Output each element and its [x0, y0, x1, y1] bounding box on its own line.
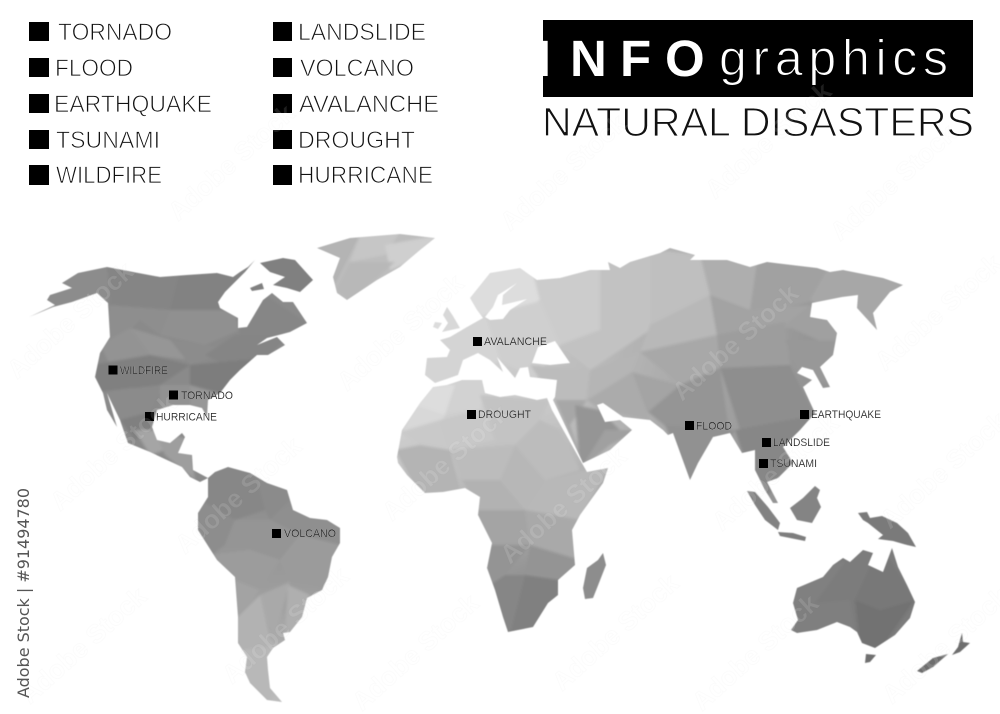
watermark pattern: Adobe Stock — [162, 97, 301, 226]
legend item: flood: FLOOD — [55, 55, 133, 82]
watermark pattern: Adobe Stock — [331, 267, 470, 396]
arctic islands — [250, 257, 314, 292]
title banner: INFOgraphics: F — [620, 30, 651, 87]
legend item: tornado: TORNADO — [58, 19, 172, 46]
watermark pattern: Adobe Stock — [706, 407, 845, 536]
island: Madagascar — [583, 553, 606, 599]
watermark pattern: Adobe Stock — [1, 255, 140, 384]
island: New Guinea — [858, 512, 916, 547]
legend item: tsunami: TSUNAMI — [56, 127, 160, 154]
legend: disaster types — [29, 19, 439, 189]
watermark pattern: Adobe Stock — [14, 580, 153, 709]
continent: North America — [32, 261, 308, 482]
watermark pattern: Adobe Stock — [216, 560, 355, 689]
legend item: hurricane: HURRICANE — [298, 162, 433, 189]
island: Sumatra — [747, 491, 780, 530]
watermark pattern: Adobe Stock — [376, 397, 515, 526]
title banner: INFOgraphics: I — [537, 30, 551, 87]
title banner: INFOgraphics: O — [665, 30, 705, 87]
marker: tornado: TORNADO — [181, 390, 233, 402]
world map — [10, 220, 970, 714]
marker: avalanche: AVALANCHE — [484, 336, 547, 348]
marker: tsunami: TSUNAMI — [770, 458, 817, 470]
watermark pattern: Adobe Stock — [494, 440, 633, 569]
title banner: INFOgraphics: graphics — [719, 30, 948, 86]
continent: South America — [197, 466, 341, 702]
watermark pattern: Adobe Stock — [824, 117, 963, 246]
marker: drought: DROUGHT — [478, 409, 531, 421]
subtitle: natural disasters: NATURAL DISASTERS — [542, 99, 974, 145]
marker: flood: FLOOD — [696, 420, 732, 432]
marker: landslide: LANDSLIDE — [773, 437, 830, 449]
marker: volcano: VOLCANO — [284, 528, 336, 540]
island: Java — [778, 532, 806, 541]
island: New Zealand south — [917, 654, 948, 673]
continent: Australia — [790, 548, 916, 648]
continent: Africa — [396, 380, 608, 632]
watermark pattern: Adobe Stock — [666, 277, 805, 406]
marker: wildfire: WILDFIRE — [120, 365, 168, 377]
island: Borneo — [790, 486, 821, 523]
map markers — [108, 336, 881, 540]
watermark pattern: Adobe Stock — [546, 567, 685, 696]
island: Tasmania — [865, 654, 876, 663]
Greenland — [317, 234, 435, 300]
watermark pattern: Adobe Stock — [494, 107, 633, 236]
continent: Eurasia — [424, 248, 903, 504]
legend item: earthquake: EARTHQUAKE — [54, 91, 212, 118]
island: Ireland — [433, 322, 442, 329]
stock image credit: Adobe Stock | #91494780 — [14, 488, 33, 698]
legend item: drought: DROUGHT — [298, 127, 415, 154]
legend item: avalanche: AVALANCHE — [299, 91, 439, 118]
island: Great Britain — [442, 307, 460, 332]
watermark pattern: Adobe Stock — [686, 587, 825, 714]
watermark pattern: Adobe Stock — [346, 587, 485, 714]
legend item: landslide: LANDSLIDE — [298, 19, 426, 46]
island: New Zealand north — [952, 633, 970, 655]
watermark pattern: Adobe Stock — [699, 75, 838, 204]
title block — [537, 20, 974, 145]
watermark pattern: Adobe Stock — [169, 430, 308, 559]
marker: earthquake: EARTHQUAKE — [811, 409, 881, 421]
marker: hurricane: HURRICANE — [156, 412, 217, 424]
title banner: INFOgraphics — [537, 20, 973, 97]
title banner: INFOgraphics: N — [570, 30, 607, 87]
legend item: volcano: VOLCANO — [300, 55, 414, 82]
legend item: wildfire: WILDFIRE — [56, 162, 162, 189]
watermark pattern: Adobe Stock — [44, 387, 183, 516]
